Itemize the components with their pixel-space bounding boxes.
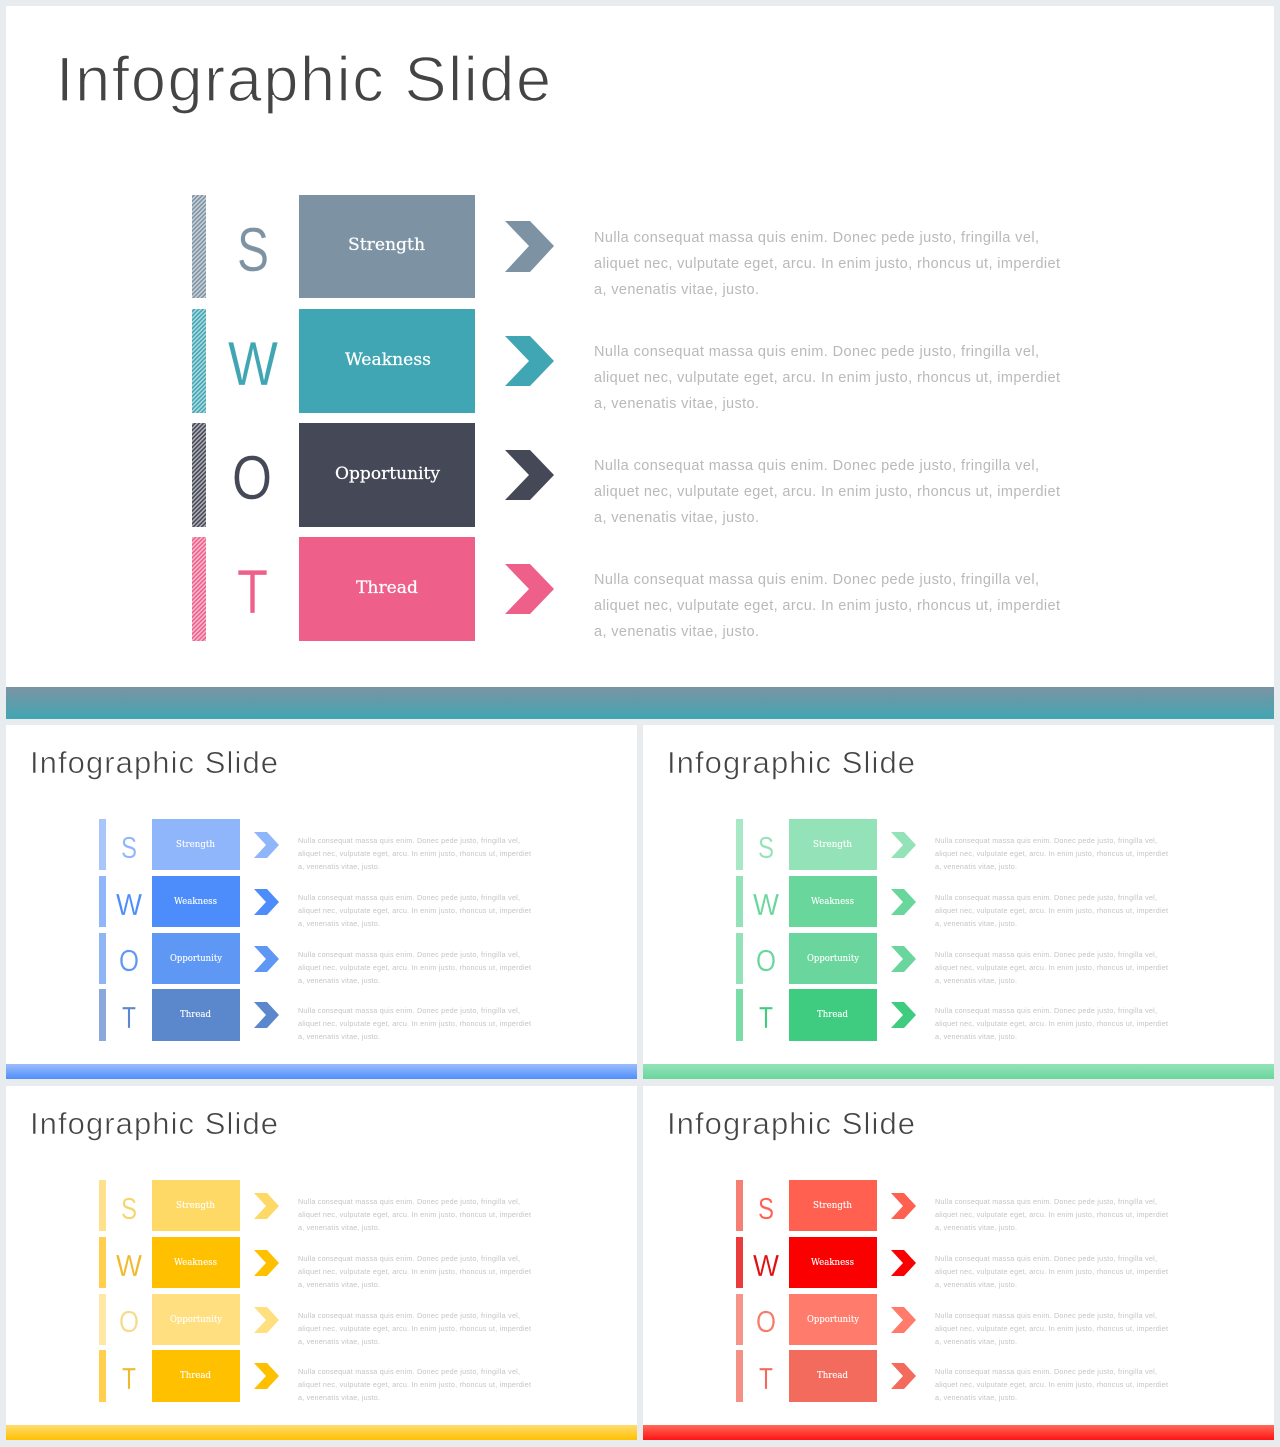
row: Opportunity: O	[232, 444, 272, 513]
row: Strength: a, venenatis vitae, justo.	[935, 862, 1017, 871]
row: Strength	[99, 1180, 531, 1232]
row: Strength	[736, 1180, 1168, 1232]
row: Strength: aliquet nec, vulputate eget, arcu. In enim justo, rhoncus ut, imperdiet	[298, 849, 531, 858]
row: Opportunity: O	[756, 1304, 776, 1339]
footer bar	[6, 1064, 637, 1079]
row: Strength: Nulla consequat massa quis enim. Donec pede justo, fringilla vel,	[594, 230, 1039, 246]
row: Weakness	[99, 876, 531, 928]
row: Strength: aliquet nec, vulputate eget, arcu. In enim justo, rhoncus ut, imperdiet	[935, 1210, 1168, 1219]
footer bar	[6, 687, 1274, 719]
row: Strength: a, venenatis vitae, justo.	[935, 1223, 1017, 1232]
row: Weakness: W	[753, 1248, 780, 1283]
row: Thread: Nulla consequat massa quis enim. Donec pede justo, fringilla vel,	[594, 572, 1039, 588]
row: Weakness: a, venenatis vitae, justo.	[935, 919, 1017, 928]
row: Strength: a, venenatis vitae, justo.	[298, 1223, 380, 1232]
row: Strength	[99, 819, 531, 871]
row: Thread: T	[759, 1361, 773, 1396]
row: Opportunity: Nulla consequat massa quis enim. Donec pede justo, fringilla vel,	[594, 458, 1039, 474]
row: Opportunity: O	[756, 943, 776, 978]
row: Opportunity	[99, 1294, 531, 1346]
row: Weakness: Weakness	[174, 1258, 217, 1268]
row: Thread: a, venenatis vitae, justo.	[594, 624, 759, 640]
row: Weakness: Weakness	[811, 1258, 854, 1268]
row: Opportunity: Nulla consequat massa quis enim. Donec pede justo, fringilla vel,	[935, 1311, 1157, 1320]
row: Thread: a, venenatis vitae, justo.	[298, 1393, 380, 1402]
row: Opportunity	[99, 933, 531, 985]
row: Strength: Strength	[176, 840, 215, 850]
row: Opportunity: O	[119, 943, 139, 978]
row: Strength: Nulla consequat massa quis enim. Donec pede justo, fringilla vel,	[935, 836, 1157, 845]
row: Weakness: W	[228, 330, 278, 399]
row: Opportunity: a, venenatis vitae, justo.	[935, 976, 1017, 985]
row: Strength: S	[121, 1191, 137, 1226]
row: Weakness: Weakness	[811, 897, 854, 907]
row: Thread: a, venenatis vitae, justo.	[298, 1032, 380, 1041]
row: Thread: Thread	[817, 1010, 848, 1020]
row: Thread: T	[122, 1361, 136, 1396]
row: Thread: Nulla consequat massa quis enim. Donec pede justo, fringilla vel,	[935, 1006, 1157, 1015]
row: Opportunity: Nulla consequat massa quis enim. Donec pede justo, fringilla vel,	[298, 1311, 520, 1320]
row: Weakness: W	[753, 887, 780, 922]
row: Strength: a, venenatis vitae, justo.	[298, 862, 380, 871]
row: Strength: aliquet nec, vulputate eget, arcu. In enim justo, rhoncus ut, imperdiet	[935, 849, 1168, 858]
row: Weakness: Nulla consequat massa quis enim. Donec pede justo, fringilla vel,	[298, 893, 520, 902]
row: Thread	[736, 1350, 1168, 1402]
row: Strength: Strength	[348, 235, 425, 255]
row: Weakness: aliquet nec, vulputate eget, arcu. In enim justo, rhoncus ut, imperdiet	[594, 370, 1060, 386]
row: Thread	[99, 1350, 531, 1402]
row: Opportunity	[736, 933, 1168, 985]
row: Strength: S	[758, 1191, 774, 1226]
row: Opportunity: a, venenatis vitae, justo.	[594, 510, 759, 526]
row: Strength: Nulla consequat massa quis enim. Donec pede justo, fringilla vel,	[298, 1197, 520, 1206]
row: Thread	[192, 537, 1060, 641]
row: Weakness	[192, 309, 1060, 413]
row: Weakness: a, venenatis vitae, justo.	[935, 1280, 1017, 1289]
row: Opportunity: Opportunity	[335, 464, 440, 484]
title: Infographic Slide	[30, 745, 278, 780]
panel: green slide	[643, 725, 1274, 1079]
row: Strength: S	[121, 830, 137, 865]
row: Thread: a, venenatis vitae, justo.	[935, 1393, 1017, 1402]
title: Infographic Slide	[667, 1106, 915, 1141]
row: Opportunity: aliquet nec, vulputate eget, arcu. In enim justo, rhoncus ut, imperdiet	[935, 963, 1168, 972]
row: Thread: aliquet nec, vulputate eget, arcu. In enim justo, rhoncus ut, imperdiet	[298, 1019, 531, 1028]
row: Thread: Nulla consequat massa quis enim. Donec pede justo, fringilla vel,	[935, 1367, 1157, 1376]
row: Opportunity: aliquet nec, vulputate eget, arcu. In enim justo, rhoncus ut, imperdiet	[298, 963, 531, 972]
title: Infographic Slide	[56, 45, 551, 115]
title: Infographic Slide	[30, 1106, 278, 1141]
row: Weakness: a, venenatis vitae, justo.	[594, 396, 759, 412]
row: Thread: T	[122, 1000, 136, 1035]
row: Thread: aliquet nec, vulputate eget, arcu. In enim justo, rhoncus ut, imperdiet	[594, 598, 1060, 614]
row: Thread: T	[237, 558, 268, 627]
row: Opportunity: aliquet nec, vulputate eget, arcu. In enim justo, rhoncus ut, imperdiet	[594, 484, 1060, 500]
row: Thread: aliquet nec, vulputate eget, arcu. In enim justo, rhoncus ut, imperdiet	[935, 1380, 1168, 1389]
row: Thread: Thread	[180, 1010, 211, 1020]
row: Weakness: a, venenatis vitae, justo.	[298, 1280, 380, 1289]
row: Strength: aliquet nec, vulputate eget, arcu. In enim justo, rhoncus ut, imperdiet	[594, 256, 1060, 272]
row: Opportunity: a, venenatis vitae, justo.	[298, 1337, 380, 1346]
row: Thread: a, venenatis vitae, justo.	[935, 1032, 1017, 1041]
row: Opportunity: O	[119, 1304, 139, 1339]
row: Weakness: W	[116, 1248, 143, 1283]
row: Weakness: Weakness	[174, 897, 217, 907]
row: Weakness: aliquet nec, vulputate eget, arcu. In enim justo, rhoncus ut, imperdiet	[298, 906, 531, 915]
row: Opportunity: Opportunity	[807, 1315, 860, 1325]
row: Thread: Thread	[817, 1371, 848, 1381]
row: Strength: Nulla consequat massa quis enim. Donec pede justo, fringilla vel,	[298, 836, 520, 845]
row: Opportunity: Nulla consequat massa quis enim. Donec pede justo, fringilla vel,	[935, 950, 1157, 959]
row: Strength: a, venenatis vitae, justo.	[594, 282, 759, 298]
row: Strength: Strength	[176, 1201, 215, 1211]
row: Strength: S	[237, 216, 269, 285]
row: Opportunity: aliquet nec, vulputate eget, arcu. In enim justo, rhoncus ut, imperdiet	[298, 1324, 531, 1333]
row: Thread	[99, 989, 531, 1041]
row: Opportunity: Opportunity	[807, 954, 860, 964]
row: Opportunity: a, venenatis vitae, justo.	[935, 1337, 1017, 1346]
row: Weakness: aliquet nec, vulputate eget, arcu. In enim justo, rhoncus ut, imperdiet	[935, 906, 1168, 915]
row: Opportunity	[736, 1294, 1168, 1346]
row: Strength: Strength	[813, 840, 852, 850]
row: Opportunity: aliquet nec, vulputate eget, arcu. In enim justo, rhoncus ut, imperdiet	[935, 1324, 1168, 1333]
row: Thread: aliquet nec, vulputate eget, arcu. In enim justo, rhoncus ut, imperdiet	[935, 1019, 1168, 1028]
row: Weakness: a, venenatis vitae, justo.	[298, 919, 380, 928]
row: Thread	[736, 989, 1168, 1041]
footer bar	[643, 1425, 1274, 1440]
footer bar	[643, 1064, 1274, 1079]
panel: main slide	[6, 6, 1274, 719]
row: Thread: Thread	[180, 1371, 211, 1381]
panel: yellow slide	[6, 1086, 637, 1440]
row: Strength: Strength	[813, 1201, 852, 1211]
row: Thread: Thread	[356, 578, 418, 598]
row: Weakness	[736, 1237, 1168, 1289]
row: Weakness: Nulla consequat massa quis enim. Donec pede justo, fringilla vel,	[594, 344, 1039, 360]
row: Weakness: aliquet nec, vulputate eget, arcu. In enim justo, rhoncus ut, imperdiet	[935, 1267, 1168, 1276]
row: Strength	[192, 195, 1060, 298]
row: Thread: Nulla consequat massa quis enim. Donec pede justo, fringilla vel,	[298, 1006, 520, 1015]
row: Strength: S	[758, 830, 774, 865]
row: Opportunity: a, venenatis vitae, justo.	[298, 976, 380, 985]
row: Opportunity: Opportunity	[170, 954, 223, 964]
row: Weakness: aliquet nec, vulputate eget, arcu. In enim justo, rhoncus ut, imperdiet	[298, 1267, 531, 1276]
panel: blue slide	[6, 725, 637, 1079]
row: Strength	[736, 819, 1168, 871]
row: Weakness: Weakness	[345, 350, 431, 370]
row: Thread: Nulla consequat massa quis enim. Donec pede justo, fringilla vel,	[298, 1367, 520, 1376]
row: Thread: aliquet nec, vulputate eget, arcu. In enim justo, rhoncus ut, imperdiet	[298, 1380, 531, 1389]
footer bar	[6, 1425, 637, 1440]
row: Weakness: Nulla consequat massa quis enim. Donec pede justo, fringilla vel,	[298, 1254, 520, 1263]
panel: red slide	[643, 1086, 1274, 1440]
row: Opportunity	[192, 423, 1060, 527]
row: Strength: Nulla consequat massa quis enim. Donec pede justo, fringilla vel,	[935, 1197, 1157, 1206]
title: Infographic Slide	[667, 745, 915, 780]
row: Weakness	[736, 876, 1168, 928]
row: Weakness: Nulla consequat massa quis enim. Donec pede justo, fringilla vel,	[935, 893, 1157, 902]
row: Weakness: W	[116, 887, 143, 922]
row: Opportunity: Opportunity	[170, 1315, 223, 1325]
row: Thread: T	[759, 1000, 773, 1035]
row: Weakness	[99, 1237, 531, 1289]
row: Opportunity: Nulla consequat massa quis enim. Donec pede justo, fringilla vel,	[298, 950, 520, 959]
row: Weakness: Nulla consequat massa quis enim. Donec pede justo, fringilla vel,	[935, 1254, 1157, 1263]
row: Strength: aliquet nec, vulputate eget, arcu. In enim justo, rhoncus ut, imperdiet	[298, 1210, 531, 1219]
